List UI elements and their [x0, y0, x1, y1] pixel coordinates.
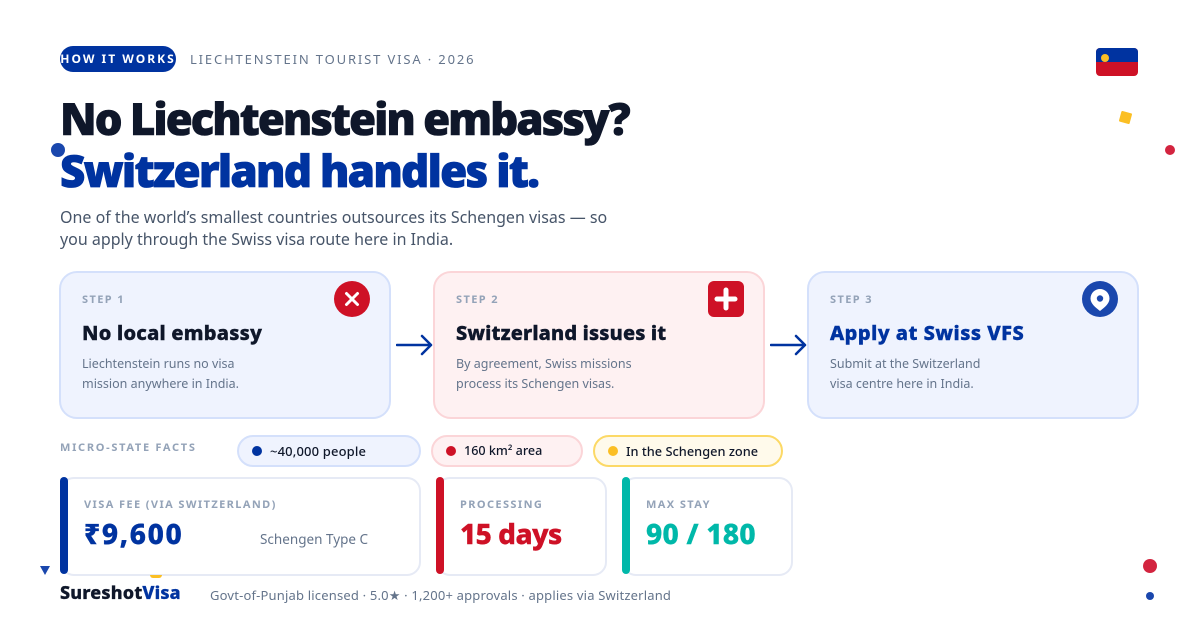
badge: how it works: HOW IT WORKS: [60, 50, 176, 67]
step label: STEP 1: [82, 292, 125, 307]
stat: processing: [436, 477, 607, 576]
step text: [82, 355, 239, 392]
decorative gold shape: [150, 575, 162, 578]
title: No Liechtenstein embassy?: [60, 88, 629, 148]
decorative blue dot: [51, 143, 65, 157]
decorative blue triangle: [40, 566, 50, 575]
title: Switzerland handles it.: [60, 140, 538, 200]
subtitle: [60, 206, 607, 250]
step text: By agreement, Swiss missions: [456, 355, 632, 372]
arrow 2: [770, 334, 806, 356]
step heading: Apply at Swiss VFS: [830, 319, 1024, 346]
pill: area: 160 km² area: [464, 442, 542, 459]
subtitle: you apply through the Swiss visa route here in India.: [60, 228, 453, 250]
stat value: ₹9,600: [84, 515, 183, 553]
panel: step 1: [59, 271, 391, 419]
step text: [830, 355, 980, 392]
step label: STEP 2: [456, 292, 499, 307]
badge: how it works: [60, 46, 176, 72]
step text: visa centre here in India.: [830, 375, 974, 392]
section label: MICRO-STATE FACTS: [60, 440, 197, 455]
step text: Liechtenstein runs no visa: [82, 355, 235, 372]
panel: step 3: [807, 271, 1139, 419]
pill: schengen: In the Schengen zone: [626, 442, 758, 460]
pill: people: ~40,000 people: [270, 442, 366, 460]
stat value: 90 / 180: [646, 515, 756, 553]
pill: schengen: [593, 435, 783, 467]
decorative gold square: [1119, 111, 1132, 124]
icon: red cross circle: [334, 281, 370, 317]
stat label: MAX STAY: [646, 497, 711, 512]
pill: area: [431, 435, 583, 467]
step text: Submit at the Switzerland: [830, 355, 980, 372]
decorative red dot: [1165, 145, 1175, 155]
step label: STEP 3: [830, 292, 873, 307]
title: [60, 88, 630, 200]
pill: people: [237, 435, 421, 467]
panel: step 2: [433, 271, 765, 419]
decorative blue dot: [1146, 592, 1154, 600]
icon: swiss cross: [708, 281, 744, 317]
stat note: Schengen Type C: [260, 530, 368, 548]
stat value: 15 days: [460, 515, 562, 553]
step heading: Switzerland issues it: [456, 319, 666, 346]
step heading: No local embassy: [82, 319, 262, 346]
decorative red dot: [1143, 559, 1157, 573]
step text: process its Schengen visas.: [456, 375, 614, 392]
stat: max stay: [622, 477, 793, 576]
icon: Liechtenstein flag: [1096, 48, 1138, 76]
footer text: Govt-of-Punjab licensed · 5.0★ · 1,200+ approvals · applies via Switzerland: [210, 586, 671, 604]
icon: location pin: [1082, 281, 1118, 317]
eyebrow text: LIECHTENSTEIN TOURIST VISA · 2026: [190, 50, 475, 68]
brand: SureshotVisa: [60, 581, 181, 605]
subtitle: One of the world’s smallest countries outsources its Schengen visas — so: [60, 206, 607, 228]
stat: visa fee: [60, 477, 421, 576]
stat label: PROCESSING: [460, 497, 543, 512]
stat label: VISA FEE (VIA SWITZERLAND): [84, 497, 277, 512]
step text: [456, 355, 632, 392]
arrow 1: [396, 334, 432, 356]
step text: mission anywhere in India.: [82, 375, 239, 392]
